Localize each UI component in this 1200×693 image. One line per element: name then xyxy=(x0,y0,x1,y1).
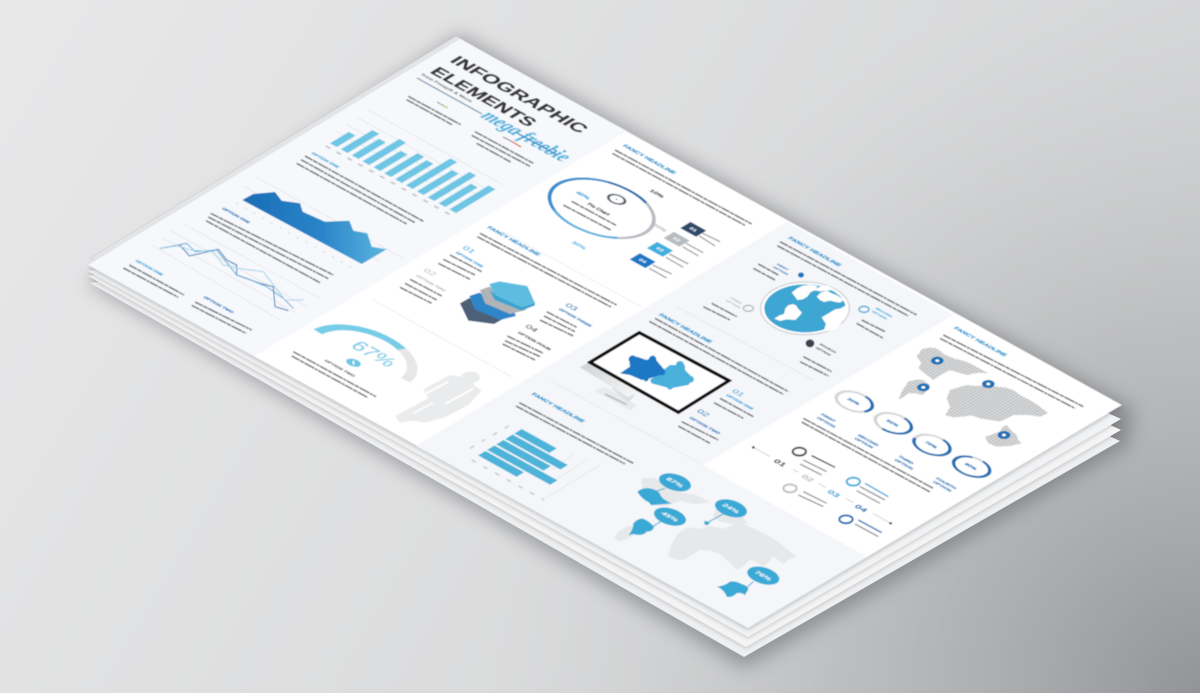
text block: option one and two under line chart: OPTION TWO xyxy=(201,296,235,314)
gauge icon xyxy=(343,357,364,369)
heading: FANCY HEADLINE xyxy=(952,326,1009,358)
gauge labels: FOURTH xyxy=(935,477,958,490)
title block xyxy=(407,53,593,166)
globe graphic xyxy=(761,282,849,335)
dotted world map xyxy=(898,347,1048,447)
gauge: 67 percent: OPTION TWO xyxy=(323,359,357,378)
title block: INFOGRAPHIC xyxy=(446,53,593,136)
panel: globe: OPTION xyxy=(814,347,832,356)
panel: left column xyxy=(88,39,627,356)
pie legend: 02 xyxy=(671,237,681,243)
hex stack panel: OPTION ONE xyxy=(453,251,485,269)
panel: monitor: OPTION TWO xyxy=(687,416,722,435)
ring gauges: 50% xyxy=(884,419,900,428)
pie legend: 04 xyxy=(637,258,648,265)
hex stack graphic xyxy=(460,281,535,324)
long text lines xyxy=(802,418,933,492)
pie legend: 03 xyxy=(654,247,665,253)
gauge labels: OPTION xyxy=(853,437,874,449)
divider: globe and monitor xyxy=(677,307,813,380)
timeline: 04 xyxy=(852,503,870,513)
panel: globe: FOURTH xyxy=(818,343,837,354)
timeline icons xyxy=(783,448,860,523)
timeline: 02 xyxy=(799,473,816,483)
pie icon xyxy=(605,193,628,206)
timeline xyxy=(752,446,892,537)
gauge: 67 percent xyxy=(267,304,453,410)
text block: option one and two under line chart: OPTION ONE xyxy=(133,259,165,277)
pie chart: Pie Chart xyxy=(586,203,611,217)
bar chart: vertical bars xyxy=(326,110,503,217)
ring gauges: 70% xyxy=(923,441,938,450)
bubbles with percentages: 87% xyxy=(664,476,686,489)
panel: horizontal bar chart xyxy=(470,392,633,500)
gauge: 67 percent: 67% xyxy=(346,339,401,370)
gauge labels: OPTION xyxy=(816,416,837,428)
stack of paper sheets xyxy=(88,34,1132,668)
heading: pie panel: FANCY HEADLINE xyxy=(621,144,678,175)
bubble connectors xyxy=(650,488,753,589)
timeline: 01 xyxy=(771,458,789,468)
panel: monitor xyxy=(580,333,755,443)
ring gauges: 30% xyxy=(845,397,861,406)
hex stack panel: 04 xyxy=(523,323,540,333)
area chart xyxy=(236,177,403,270)
blue countries xyxy=(628,488,748,597)
gauge labels: OPTION xyxy=(932,480,953,492)
text block: option one under bars xyxy=(297,152,423,224)
gauge labels: SECOND xyxy=(857,434,881,447)
options text: 01 xyxy=(460,245,478,255)
panel: globe: SECOND xyxy=(874,307,894,318)
second option xyxy=(859,306,869,312)
divider: hex and gauge xyxy=(373,300,512,377)
panel: bubble map: 45% xyxy=(659,511,681,523)
heading: globe panel: FANCY HEADLINE xyxy=(786,236,843,268)
gauge labels: OPTION xyxy=(893,458,914,470)
pie chart: 20% xyxy=(650,223,668,233)
panel: centre column xyxy=(416,222,953,628)
panel: globe: OPTION xyxy=(724,299,742,309)
panel: bubble map: 76% xyxy=(753,570,774,582)
text block: option one under bars: OPTION ONE xyxy=(309,152,341,169)
top sheet with all content xyxy=(88,39,1122,628)
text block: option one under area chart: OPTION ONE xyxy=(220,207,252,225)
icon: person silhouette xyxy=(395,371,482,423)
line chart xyxy=(152,223,320,320)
gray continents xyxy=(614,477,797,570)
heading: pie panel xyxy=(612,144,752,225)
pie legend xyxy=(630,222,720,278)
timeline labels xyxy=(798,456,888,537)
subtitle: from Freepik & More xyxy=(419,73,473,103)
pie chart: 10% xyxy=(648,189,666,199)
ring gauges xyxy=(827,386,999,482)
puzzle pieces xyxy=(650,361,694,390)
monitor stand xyxy=(594,387,637,411)
monitor options: 01 xyxy=(730,388,747,398)
gauge labels xyxy=(816,413,958,492)
fourth option xyxy=(806,339,814,347)
hex stack panel: FANCY HEADLINE xyxy=(485,226,542,257)
heading: monitor panel: FANCY HEADLINE xyxy=(657,313,714,344)
hex stack panel: OPTION THREE xyxy=(557,308,594,328)
gauge labels: THIRD xyxy=(897,455,916,465)
pie legend: 01 xyxy=(687,227,698,233)
monitor chin xyxy=(580,362,640,397)
hex stack panel: 02 xyxy=(421,267,439,277)
small coloured markers xyxy=(437,102,521,147)
panel: monitor: OPTION ONE xyxy=(724,394,755,411)
pie chart xyxy=(500,150,703,267)
pie chart: 30% xyxy=(570,241,588,251)
hex stack panel: OPTION TWO xyxy=(414,274,447,293)
panel: globe xyxy=(703,263,894,376)
title block: ELEMENTS xyxy=(426,64,541,129)
intro text lines xyxy=(407,96,533,166)
bubbles with percentages xyxy=(653,470,697,495)
hex stack panel: OPTION FOUR xyxy=(516,331,552,352)
panel: monitor: 02 xyxy=(695,408,712,418)
panel: right column xyxy=(752,326,1083,537)
panel: globe: OPTION xyxy=(870,310,888,320)
sheet base xyxy=(88,39,1122,628)
panel: horizontal bar chart: FANCY HEADLINE xyxy=(530,392,586,424)
divider: pie and hex xyxy=(502,231,642,307)
third option: THIRD xyxy=(728,297,743,305)
divider: monitor and bars xyxy=(550,380,703,465)
script title: mega freebie xyxy=(476,107,578,165)
panel: bubble map: 24% xyxy=(720,502,742,515)
text block: option one under area chart xyxy=(206,207,333,283)
map pins xyxy=(917,357,1010,439)
ring gauges: 90% xyxy=(963,462,978,471)
timeline: 03 xyxy=(825,489,842,499)
panel: bubble map xyxy=(614,470,797,597)
heading: monitor panel xyxy=(649,313,788,394)
hex stack panel: 03 xyxy=(563,302,580,312)
panel: globe: OPTION xyxy=(772,266,789,276)
first option: FIRST xyxy=(776,263,790,271)
heading: globe panel xyxy=(777,236,917,316)
monitor screen xyxy=(590,333,729,412)
pie labels: 40% xyxy=(574,191,592,201)
gauge labels: FIRST xyxy=(820,413,837,423)
text block: option one and two under line chart xyxy=(123,259,252,333)
hex stack panel xyxy=(400,226,617,360)
